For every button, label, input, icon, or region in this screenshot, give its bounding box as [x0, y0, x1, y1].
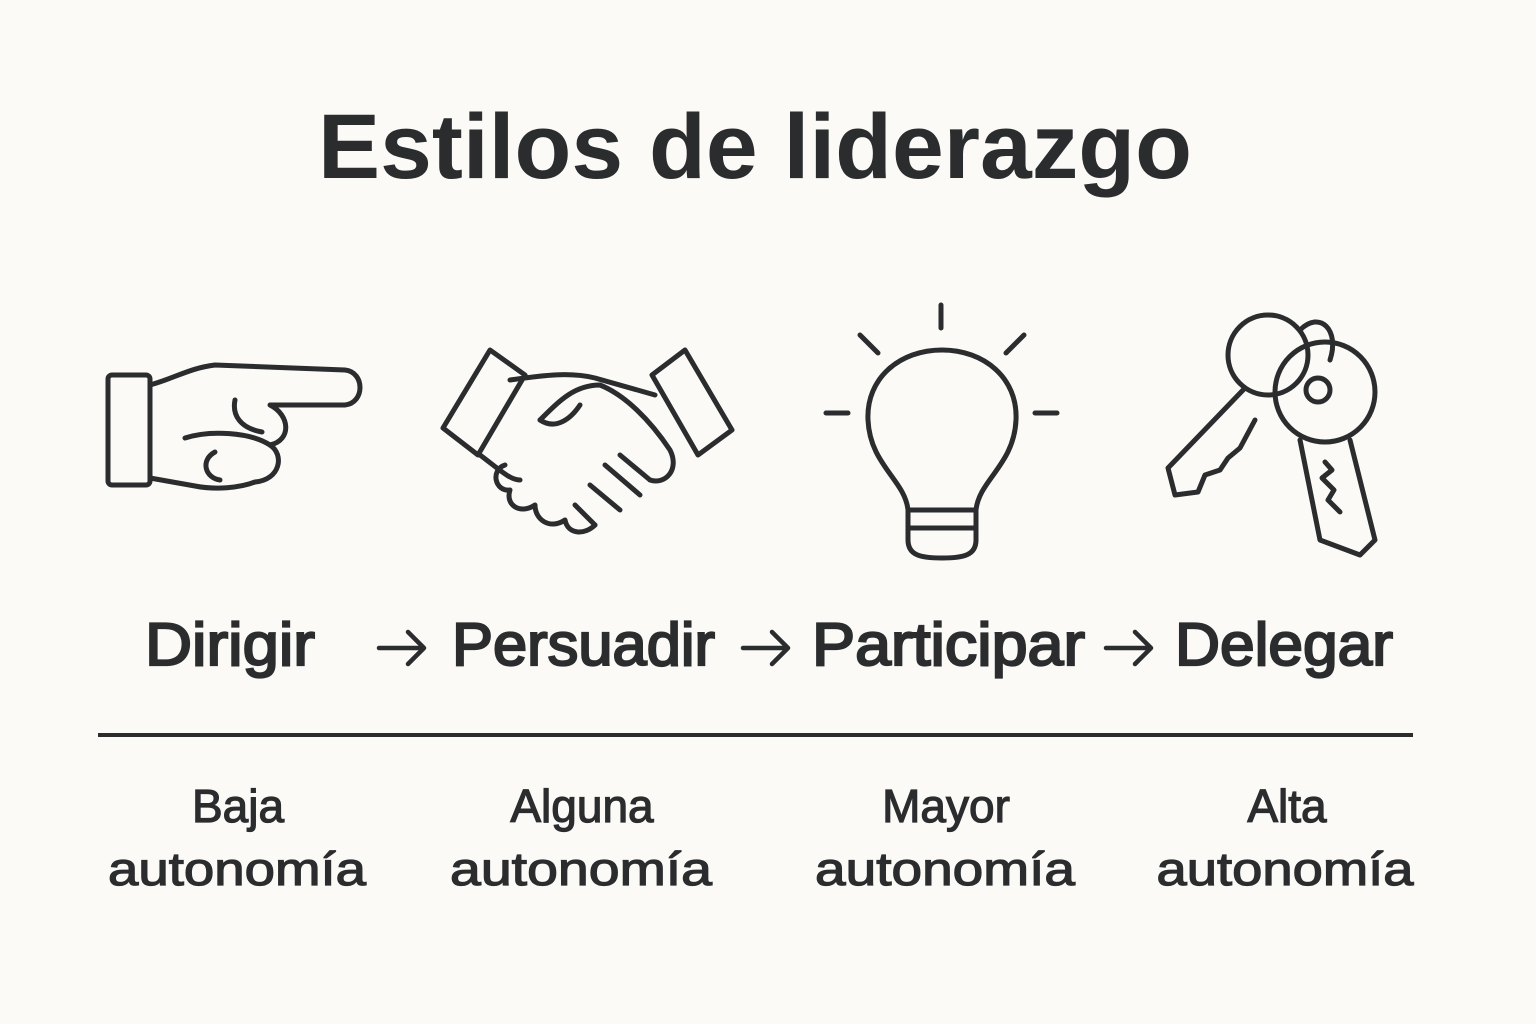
autonomy labels: autonomía [815, 843, 1075, 895]
autonomy: alta: Alta [1247, 780, 1327, 832]
autonomy labels: autonomía [450, 843, 712, 895]
label: Participar: Participar [812, 611, 1085, 678]
arrow 2 [743, 632, 788, 664]
icon: pointing hand [108, 365, 360, 488]
autonomy labels [108, 780, 1414, 895]
arrow 3 [1106, 632, 1151, 664]
autonomy: mayor: Mayor [882, 780, 1010, 832]
icon: keys [1168, 315, 1375, 555]
label: Persuadir: Persuadir [452, 611, 715, 678]
arrow 1 [379, 632, 424, 664]
arrows [379, 632, 1151, 664]
label: Dirigir: Dirigir [145, 611, 315, 678]
autonomy: alguna: Alguna [510, 780, 654, 832]
autonomy: baja: Baja [192, 780, 284, 832]
title: Estilos de liderazgo [318, 96, 1192, 198]
autonomy labels: autonomía [1156, 843, 1414, 895]
icon: handshake [443, 350, 732, 532]
axis line [98, 733, 1413, 737]
autonomy labels: autonomía [108, 843, 366, 895]
icon: light bulb [826, 305, 1057, 558]
labels row [145, 611, 1393, 678]
label: Delegar: Delegar [1175, 611, 1393, 678]
